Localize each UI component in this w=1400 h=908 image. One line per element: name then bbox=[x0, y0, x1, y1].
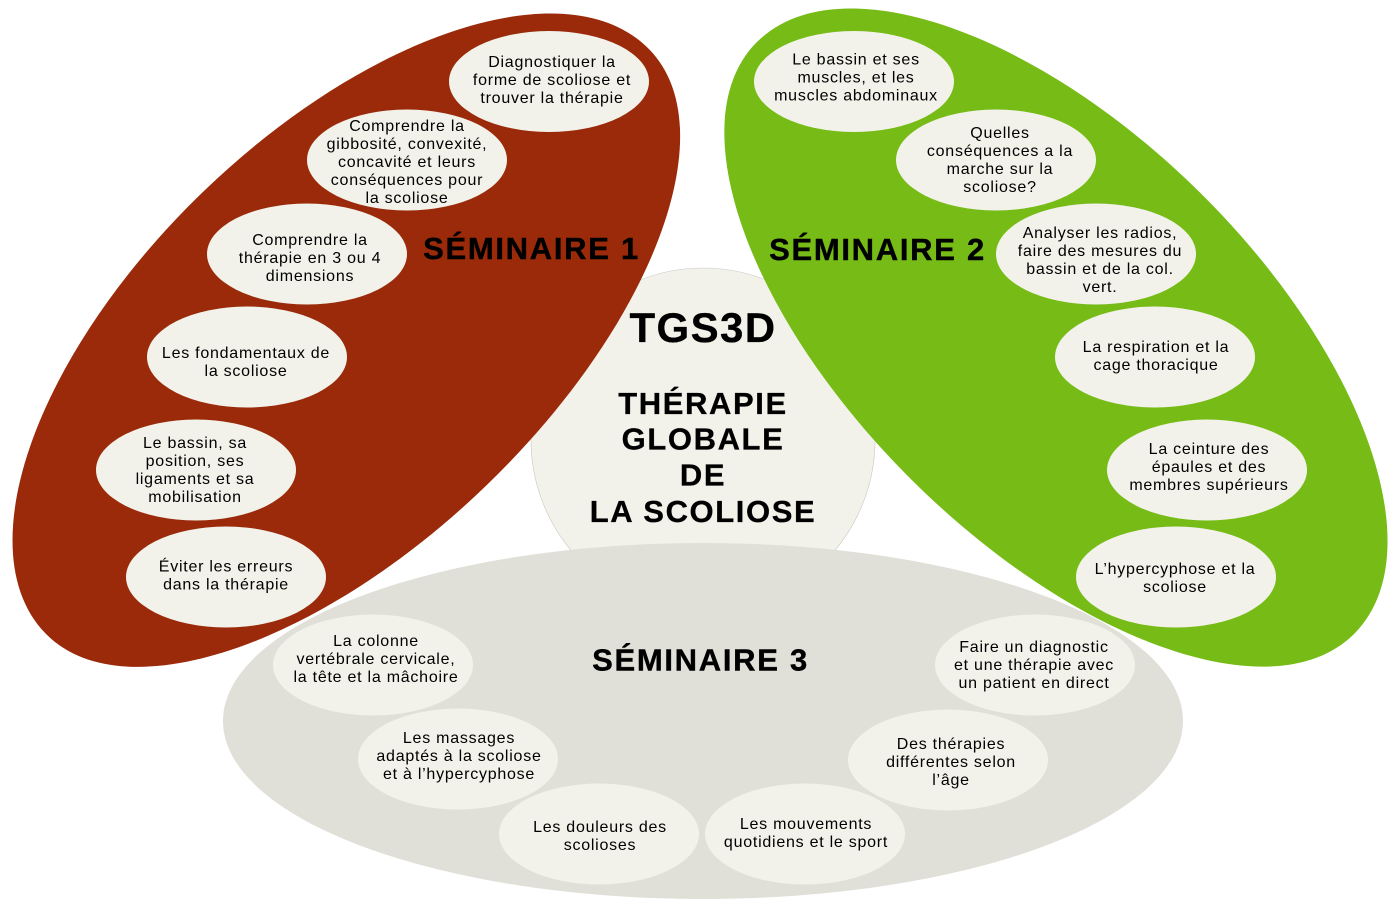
bubble: radios: vert. bbox=[1083, 279, 1117, 296]
bubble: fondamentaux bbox=[147, 306, 347, 408]
bubble: mouvements bbox=[705, 784, 905, 884]
central title: THÉRAPIE bbox=[618, 386, 788, 421]
bubble: radios bbox=[996, 204, 1196, 304]
bubble: douleurs: Les douleurs des bbox=[533, 819, 667, 836]
bubble: diagnostiquer bbox=[449, 31, 649, 132]
bubble: marche: scoliose? bbox=[963, 179, 1037, 196]
bubble: thérapies selon l'âge bbox=[848, 710, 1048, 810]
bubble: ceinture: membres supérieurs bbox=[1129, 477, 1289, 494]
bubble: fondamentaux: Les fondamentaux de bbox=[162, 345, 330, 362]
bubble: erreurs: Éviter les erreurs bbox=[159, 556, 293, 576]
heading: séminaire 3: SÉMINAIRE 3 bbox=[592, 642, 809, 678]
bubble: diagnostiquer: trouver la thérapie bbox=[480, 90, 624, 107]
bubble: thérapie 3 ou 4 dimensions bbox=[207, 204, 407, 304]
bubble: thérapies selon l'âge: l’âge bbox=[932, 772, 970, 789]
bubble: diagnostic patient bbox=[935, 614, 1135, 716]
bubble: respiration: cage thoracique bbox=[1093, 357, 1219, 374]
bubble: gibbosité: concavité et leurs bbox=[338, 154, 476, 171]
panel: séminaire 1 ellipse bbox=[0, 0, 789, 777]
bubble: gibbosité: conséquences pour bbox=[331, 172, 483, 189]
bubble: colonne cervicale bbox=[273, 614, 473, 716]
panel: central circle bbox=[531, 268, 875, 612]
bubble: thérapies selon l'âge: différentes selon bbox=[886, 754, 1016, 771]
bubble: bassin et muscles: muscles, et les bbox=[797, 70, 915, 86]
bubble: gibbosité: Comprendre la bbox=[349, 118, 465, 135]
bubble: diagnostic patient: un patient en direct bbox=[958, 675, 1110, 692]
bubble: respiration: La respiration et la bbox=[1083, 339, 1229, 356]
bubble: marche bbox=[896, 110, 1096, 210]
bubble: bassin: Le bassin, sa bbox=[143, 435, 247, 452]
bubble: bassin et muscles: muscles abdominaux bbox=[774, 88, 938, 104]
bubble: radios: Analyser les radios, bbox=[1023, 225, 1177, 242]
bubble: diagnostiquer: Diagnostiquer la bbox=[488, 54, 616, 71]
bubble: ceinture: La ceinture des bbox=[1149, 441, 1269, 458]
central title: TGS3D bbox=[629, 304, 777, 351]
bubble: bassin: ligaments et sa bbox=[136, 471, 254, 488]
bubble: marche: marche sur la bbox=[947, 161, 1053, 178]
bubble: bassin: mobilisation bbox=[148, 489, 242, 506]
panel: séminaire 3 ellipse bbox=[223, 543, 1183, 899]
bubble: radios: faire des mesures du bbox=[1018, 243, 1182, 260]
bubble: thérapie 3 ou 4 dimensions: Comprendre la bbox=[252, 232, 368, 249]
bubble: ceinture bbox=[1107, 420, 1307, 520]
bubble: hypercyphose bbox=[1076, 526, 1276, 628]
bubble: hypercyphose: L’hypercyphose et la bbox=[1095, 561, 1255, 578]
bubble: radios: bassin et de la col. bbox=[1026, 261, 1174, 278]
bubble: diagnostic patient: et une thérapie avec bbox=[954, 657, 1114, 674]
bubble: bassin et muscles: Le bassin et ses bbox=[792, 52, 920, 68]
bubble: respiration bbox=[1055, 306, 1255, 408]
bubble: douleurs: scolioses bbox=[564, 837, 636, 854]
bubble: massages: adaptés à la scoliose bbox=[376, 748, 542, 765]
bubble: colonne cervicale: La colonne bbox=[333, 633, 419, 650]
heading: séminaire 1: SÉMINAIRE 1 bbox=[423, 231, 640, 266]
bubble: mouvements: Les mouvements bbox=[740, 816, 872, 833]
bubble: thérapie 3 ou 4 dimensions: dimensions bbox=[266, 268, 354, 285]
panel: séminaire 2 ellipse bbox=[614, 0, 1400, 777]
bubble: erreurs: dans la thérapie bbox=[163, 576, 289, 594]
bubble: bassin bbox=[96, 420, 296, 520]
bubble: colonne cervicale: vertébrale cervicale, bbox=[297, 651, 455, 668]
central title: GLOBALE bbox=[622, 422, 784, 456]
bubble: colonne cervicale: la tête et la mâchoire bbox=[293, 669, 459, 686]
central title bbox=[590, 304, 816, 529]
bubble: marche: conséquences a la bbox=[927, 143, 1073, 160]
bubble: bassin et muscles bbox=[754, 31, 954, 132]
bubble: erreurs bbox=[126, 526, 326, 628]
bubble: mouvements: quotidiens et le sport bbox=[724, 834, 888, 851]
bubble: massages bbox=[358, 708, 558, 810]
bubble: diagnostiquer: forme de scoliose et bbox=[473, 72, 631, 89]
bubble: marche: Quelles bbox=[970, 125, 1030, 142]
bubble: gibbosité: gibbosité, convexité, bbox=[327, 136, 487, 153]
central title: LA SCOLIOSE bbox=[590, 494, 816, 529]
heading: séminaire 2: SÉMINAIRE 2 bbox=[769, 232, 986, 267]
bubble: massages: Les massages bbox=[403, 730, 515, 747]
bubble: fondamentaux: la scoliose bbox=[205, 363, 287, 380]
bubble: gibbosité bbox=[307, 110, 507, 210]
bubble: gibbosité: la scoliose bbox=[366, 190, 448, 207]
bubble: hypercyphose: scoliose bbox=[1143, 579, 1207, 596]
central title: DE bbox=[680, 458, 726, 492]
bubble: thérapie 3 ou 4 dimensions: thérapie en 3 ou 4 bbox=[239, 250, 381, 267]
bubble: douleurs bbox=[499, 784, 699, 884]
bubble: diagnostic patient: Faire un diagnostic bbox=[959, 639, 1109, 656]
bubble: ceinture: épaules et des bbox=[1152, 459, 1266, 476]
bubble: massages: et à l’hypercyphose bbox=[383, 766, 535, 783]
bubble: bassin: position, ses bbox=[146, 453, 244, 470]
bubble: thérapies selon l'âge: Des thérapies bbox=[897, 736, 1005, 753]
